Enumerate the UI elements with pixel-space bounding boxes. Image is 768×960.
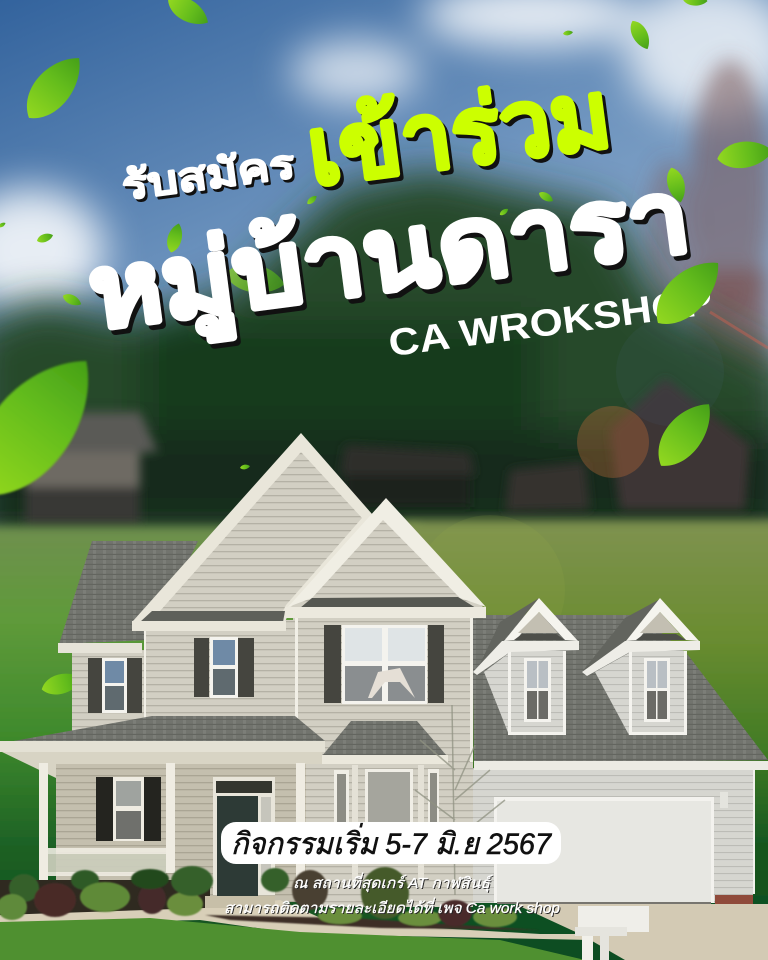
- garage roof: [472, 615, 768, 764]
- date pill: กิจกรรมเริ่ม 5-7 มิ.ย 2567: [231, 823, 552, 861]
- blurred reddish tree: [644, 60, 768, 380]
- venue text: [224, 872, 561, 918]
- title line: เข้าร่วม: เข้าร่วม: [305, 65, 620, 208]
- porch window with shutters: [96, 777, 161, 841]
- leaf: tiny top: [563, 30, 573, 36]
- title line: หมู่บ้านดารา: หมู่บ้านดารา: [86, 163, 701, 362]
- leaf: tiny title 1: [306, 194, 318, 206]
- cornice left: [132, 621, 286, 631]
- leaf: small left 1: [36, 231, 54, 245]
- leaf: tiny edge: [0, 221, 6, 229]
- venue text: ณ สถานที่สุดเกร์ AT กาฬสินธุ์: [294, 873, 494, 893]
- far left window with shutters: [88, 658, 142, 713]
- front gable: [288, 498, 486, 608]
- leaf: tiny title 2: [537, 190, 555, 204]
- grass field left: [0, 526, 420, 960]
- leaf: near title right: [664, 165, 689, 204]
- clouds: [0, 0, 768, 312]
- brick base: [715, 895, 753, 904]
- upper window with shutters: [194, 637, 254, 698]
- garage cornice: [474, 761, 768, 770]
- shrubs left: [0, 866, 213, 920]
- title line: รับสมัคร: รับสมัคร: [122, 145, 300, 211]
- porch columns: [39, 763, 305, 883]
- flower bed: [205, 867, 540, 930]
- title line: รับสมัคร: รับสมัคร: [119, 142, 298, 209]
- leaf: tiny title 4: [240, 464, 250, 470]
- sky background: [0, 0, 768, 540]
- venue text: สามารถติดตามรายละเอียดได้ที่ เพจ Ca work shop: [225, 898, 561, 918]
- porch wall: [56, 762, 306, 902]
- dormer right: [582, 598, 700, 735]
- title line: หมู่บ้านดารา: หมู่บ้านดารา: [82, 159, 697, 357]
- porch cornice: [0, 741, 325, 778]
- leaf: top right small: [626, 17, 654, 53]
- lens flare: [415, 312, 768, 665]
- leaf: tiny title 3: [499, 207, 509, 217]
- main upper wall: [145, 620, 300, 725]
- subtitle: CA WROKSHOP: CA WROKSHOP: [386, 281, 715, 365]
- lawn: [0, 918, 585, 960]
- walkway: [0, 900, 590, 940]
- left lower eave: [58, 643, 142, 653]
- leaf: over subtitle: [644, 249, 732, 337]
- title group: [68, 51, 715, 403]
- wall lamp: [720, 792, 728, 808]
- porch steps: [205, 896, 275, 908]
- bay wall: [305, 762, 473, 907]
- leaf: lower right: [646, 393, 723, 477]
- blurred background houses: [20, 378, 750, 525]
- front door: [213, 777, 275, 896]
- bay cornice: [320, 755, 448, 764]
- soil bed: [0, 880, 210, 916]
- venue text: ณ สถานที่สุดเกร์ AT กาฬสินธุ์: [293, 872, 493, 892]
- far left wall: [72, 650, 152, 735]
- leaves behind house: [39, 260, 287, 699]
- leaf: behind title left: [164, 222, 185, 254]
- leaf: top left: [15, 46, 93, 129]
- leaf: right upper: [715, 138, 768, 171]
- leaf: small left 2: [61, 291, 83, 308]
- dormer left: [473, 598, 579, 735]
- house: [0, 433, 768, 907]
- leaf: huge left: [0, 336, 117, 519]
- bay windows: [334, 765, 439, 885]
- porch roof: [8, 716, 325, 742]
- sapling: [415, 705, 505, 895]
- decorative leaves front: [0, 0, 768, 519]
- title line: เข้าร่วม: เข้าร่วม: [301, 61, 617, 205]
- grass field right: [400, 520, 768, 960]
- left hip roof: [59, 541, 198, 644]
- right upper wall: [293, 612, 473, 772]
- driveway: [515, 904, 768, 960]
- blurred forest: [0, 170, 768, 560]
- bay roof: [322, 721, 447, 756]
- main gable: [133, 433, 372, 622]
- porch railing: [48, 848, 166, 876]
- leaf: top edge: [682, 0, 708, 7]
- leaf: top centre: [163, 0, 213, 31]
- mailbox: [575, 906, 649, 960]
- garage door: [494, 797, 714, 904]
- gable roof strip: [140, 611, 285, 622]
- large window with shutters: [324, 625, 444, 704]
- cornice right: [285, 607, 486, 618]
- venue text: สามารถติดตามรายละเอียดได้ที่ เพจ Ca work shop: [224, 897, 560, 917]
- garage wall: [470, 768, 753, 903]
